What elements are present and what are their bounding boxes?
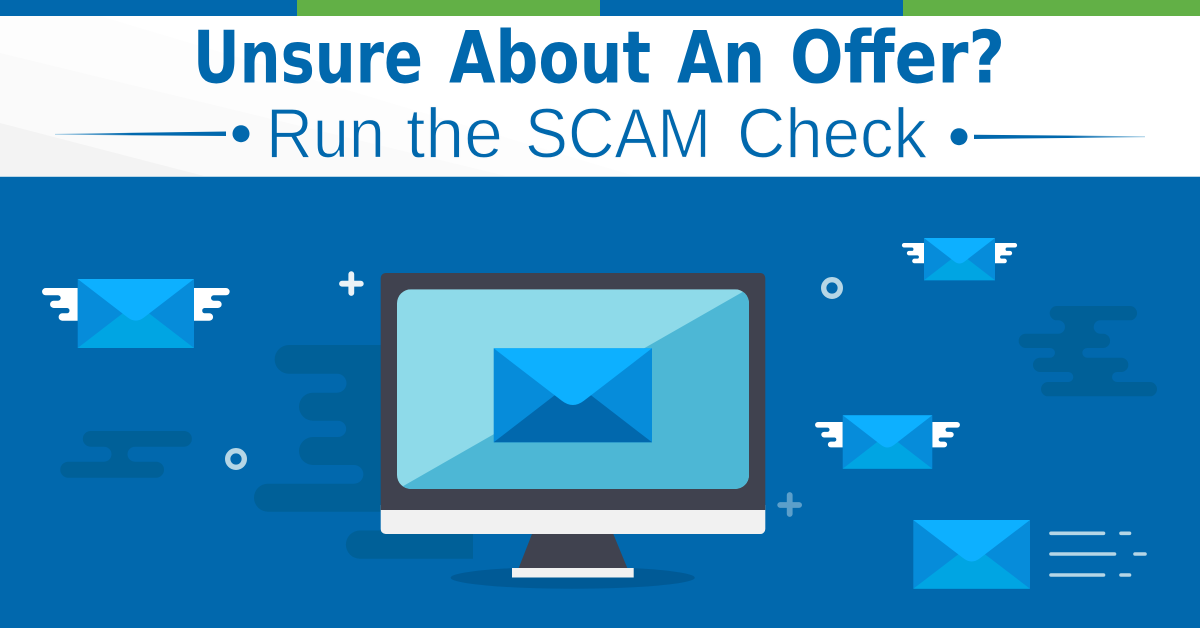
envelope bottom right xyxy=(913,520,1030,589)
monitor screen xyxy=(397,289,760,495)
small left cloud xyxy=(60,431,192,478)
subtitle: Check xyxy=(737,93,928,172)
decorative ring left xyxy=(228,451,244,467)
header panel xyxy=(0,16,1200,177)
decorative plus lower right xyxy=(780,495,799,514)
left title rule xyxy=(55,125,250,142)
winged envelope top right xyxy=(902,238,1017,280)
large background cloud xyxy=(254,345,473,559)
title: Unsure xyxy=(193,16,423,100)
monitor base xyxy=(512,568,634,578)
top colour bar xyxy=(0,0,1200,16)
title: An xyxy=(677,16,765,100)
title xyxy=(193,16,1005,100)
monitor xyxy=(381,273,765,589)
title: About xyxy=(449,16,651,100)
right cloud xyxy=(1019,306,1157,396)
winged envelope left xyxy=(42,279,230,348)
speed lines xyxy=(1051,533,1145,575)
decorative plus top left xyxy=(342,274,361,293)
right title rule xyxy=(950,128,1145,145)
subtitle: the xyxy=(406,93,503,172)
screen envelope xyxy=(494,348,652,442)
title: Offer? xyxy=(790,16,1005,100)
subtitle xyxy=(266,93,928,172)
monitor stand xyxy=(519,534,627,568)
decorative ring right xyxy=(824,280,840,296)
winged envelope middle right xyxy=(815,415,960,469)
subtitle: SCAM xyxy=(525,93,711,172)
monitor frame xyxy=(381,273,765,510)
monitor shadow xyxy=(451,567,695,589)
subtitle: Run xyxy=(266,93,385,172)
monitor chin xyxy=(381,505,765,534)
